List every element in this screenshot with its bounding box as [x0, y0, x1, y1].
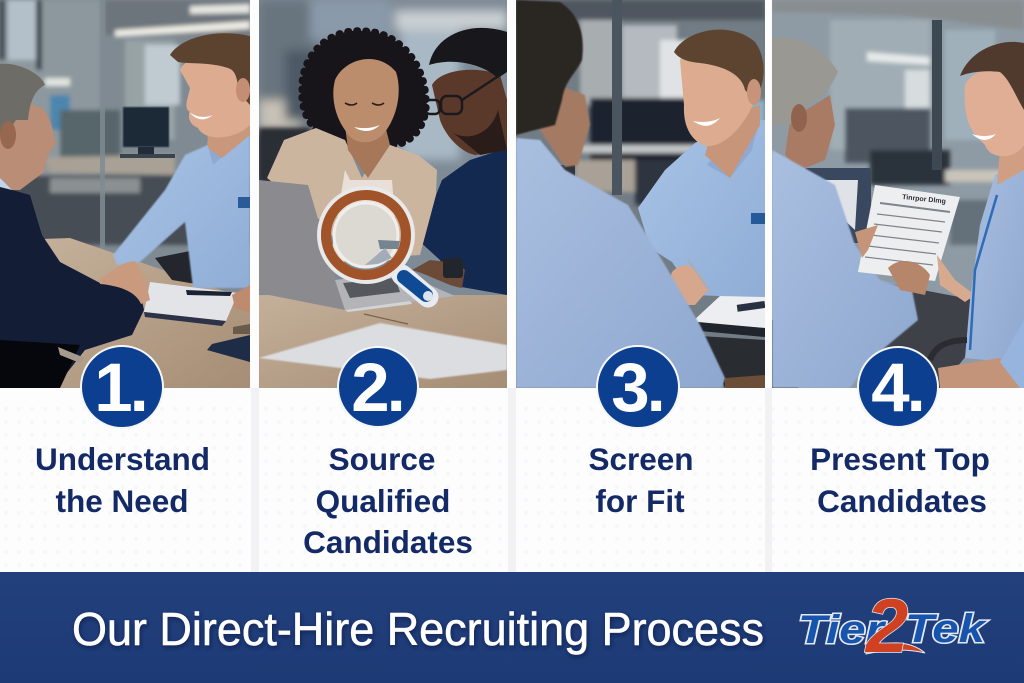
- tablet: [207, 335, 250, 362]
- step 4 label: [810, 441, 990, 519]
- step 1 label: [35, 441, 210, 519]
- step 3 label: [588, 441, 694, 519]
- old man shirt: [772, 150, 918, 388]
- Tier2Tek logo: Tier: [798, 608, 887, 652]
- step 2 label: Source: [329, 441, 435, 477]
- left man head: [0, 95, 56, 190]
- woman hair: [302, 31, 426, 145]
- step 2 label: Candidates: [303, 524, 473, 560]
- woman arm: [938, 358, 1024, 388]
- dark desk: [882, 284, 970, 388]
- step 1 label: the Need: [55, 483, 189, 519]
- panel gutters: [251, 388, 772, 572]
- step 1 badge: 1.: [94, 349, 146, 426]
- chair arm: [930, 340, 967, 360]
- panel 4: candidate presentation photo: [772, 0, 1024, 388]
- step 3 badge: 3.: [611, 349, 663, 426]
- panel 1: handshake photo: [0, 0, 250, 388]
- footer banner: [0, 572, 1024, 683]
- Tier2Tek logo: [798, 584, 987, 669]
- back man head: [540, 85, 590, 167]
- old man head: [785, 95, 835, 170]
- step 1 badge: [81, 346, 163, 428]
- Tier2Tek logo: Tek: [905, 607, 987, 651]
- step 2 badge: 2.: [351, 349, 403, 426]
- panel 2: candidate search photo: [259, 0, 507, 388]
- document: Tinrpor Dlmg: [902, 194, 946, 206]
- woman neck and face: [346, 130, 390, 178]
- papers: [259, 323, 507, 379]
- step 3 badge: [597, 346, 679, 428]
- papers and clipboard: [692, 296, 765, 328]
- left man jacket: [0, 187, 144, 388]
- magnifying glass icon: [319, 188, 433, 301]
- step 4 label: Candidates: [817, 483, 987, 519]
- step 4 label: Present Top: [810, 441, 990, 477]
- monitor behind document: [805, 168, 871, 243]
- chair: [155, 251, 194, 284]
- right man head: [705, 105, 760, 178]
- step 2 label: [303, 441, 473, 560]
- table: [42, 238, 250, 388]
- man in navy shirt: [418, 148, 507, 295]
- writing hand and pen: [670, 266, 708, 305]
- banner title: Our Direct-Hire Recruiting Process: [72, 603, 764, 655]
- right man shirt: [113, 128, 250, 288]
- step 2 label: Qualified: [316, 483, 450, 519]
- right man head: [208, 125, 250, 158]
- handshake: [100, 261, 150, 304]
- hands: [855, 225, 878, 258]
- faint dot texture: [0, 400, 1024, 572]
- step 3 label: for Fit: [595, 483, 685, 519]
- panel 3: screening interview photo: [516, 0, 765, 388]
- back man shirt: [516, 138, 725, 388]
- step 1 label: Understand: [35, 441, 210, 477]
- document: [858, 185, 960, 281]
- laptop: [259, 180, 345, 310]
- Tier2Tek logo: 2: [864, 584, 908, 669]
- step 3 label: Screen: [588, 441, 694, 477]
- step 2 badge: [338, 347, 418, 427]
- step 4 badge: 4.: [871, 349, 923, 426]
- woman jacket: [267, 128, 437, 260]
- woman shirt: [965, 170, 1024, 360]
- woman head: [997, 145, 1024, 185]
- clipboard and phone: [144, 282, 238, 321]
- table: [259, 295, 507, 388]
- step 4 badge: [858, 347, 938, 427]
- right man shirt: [638, 120, 765, 298]
